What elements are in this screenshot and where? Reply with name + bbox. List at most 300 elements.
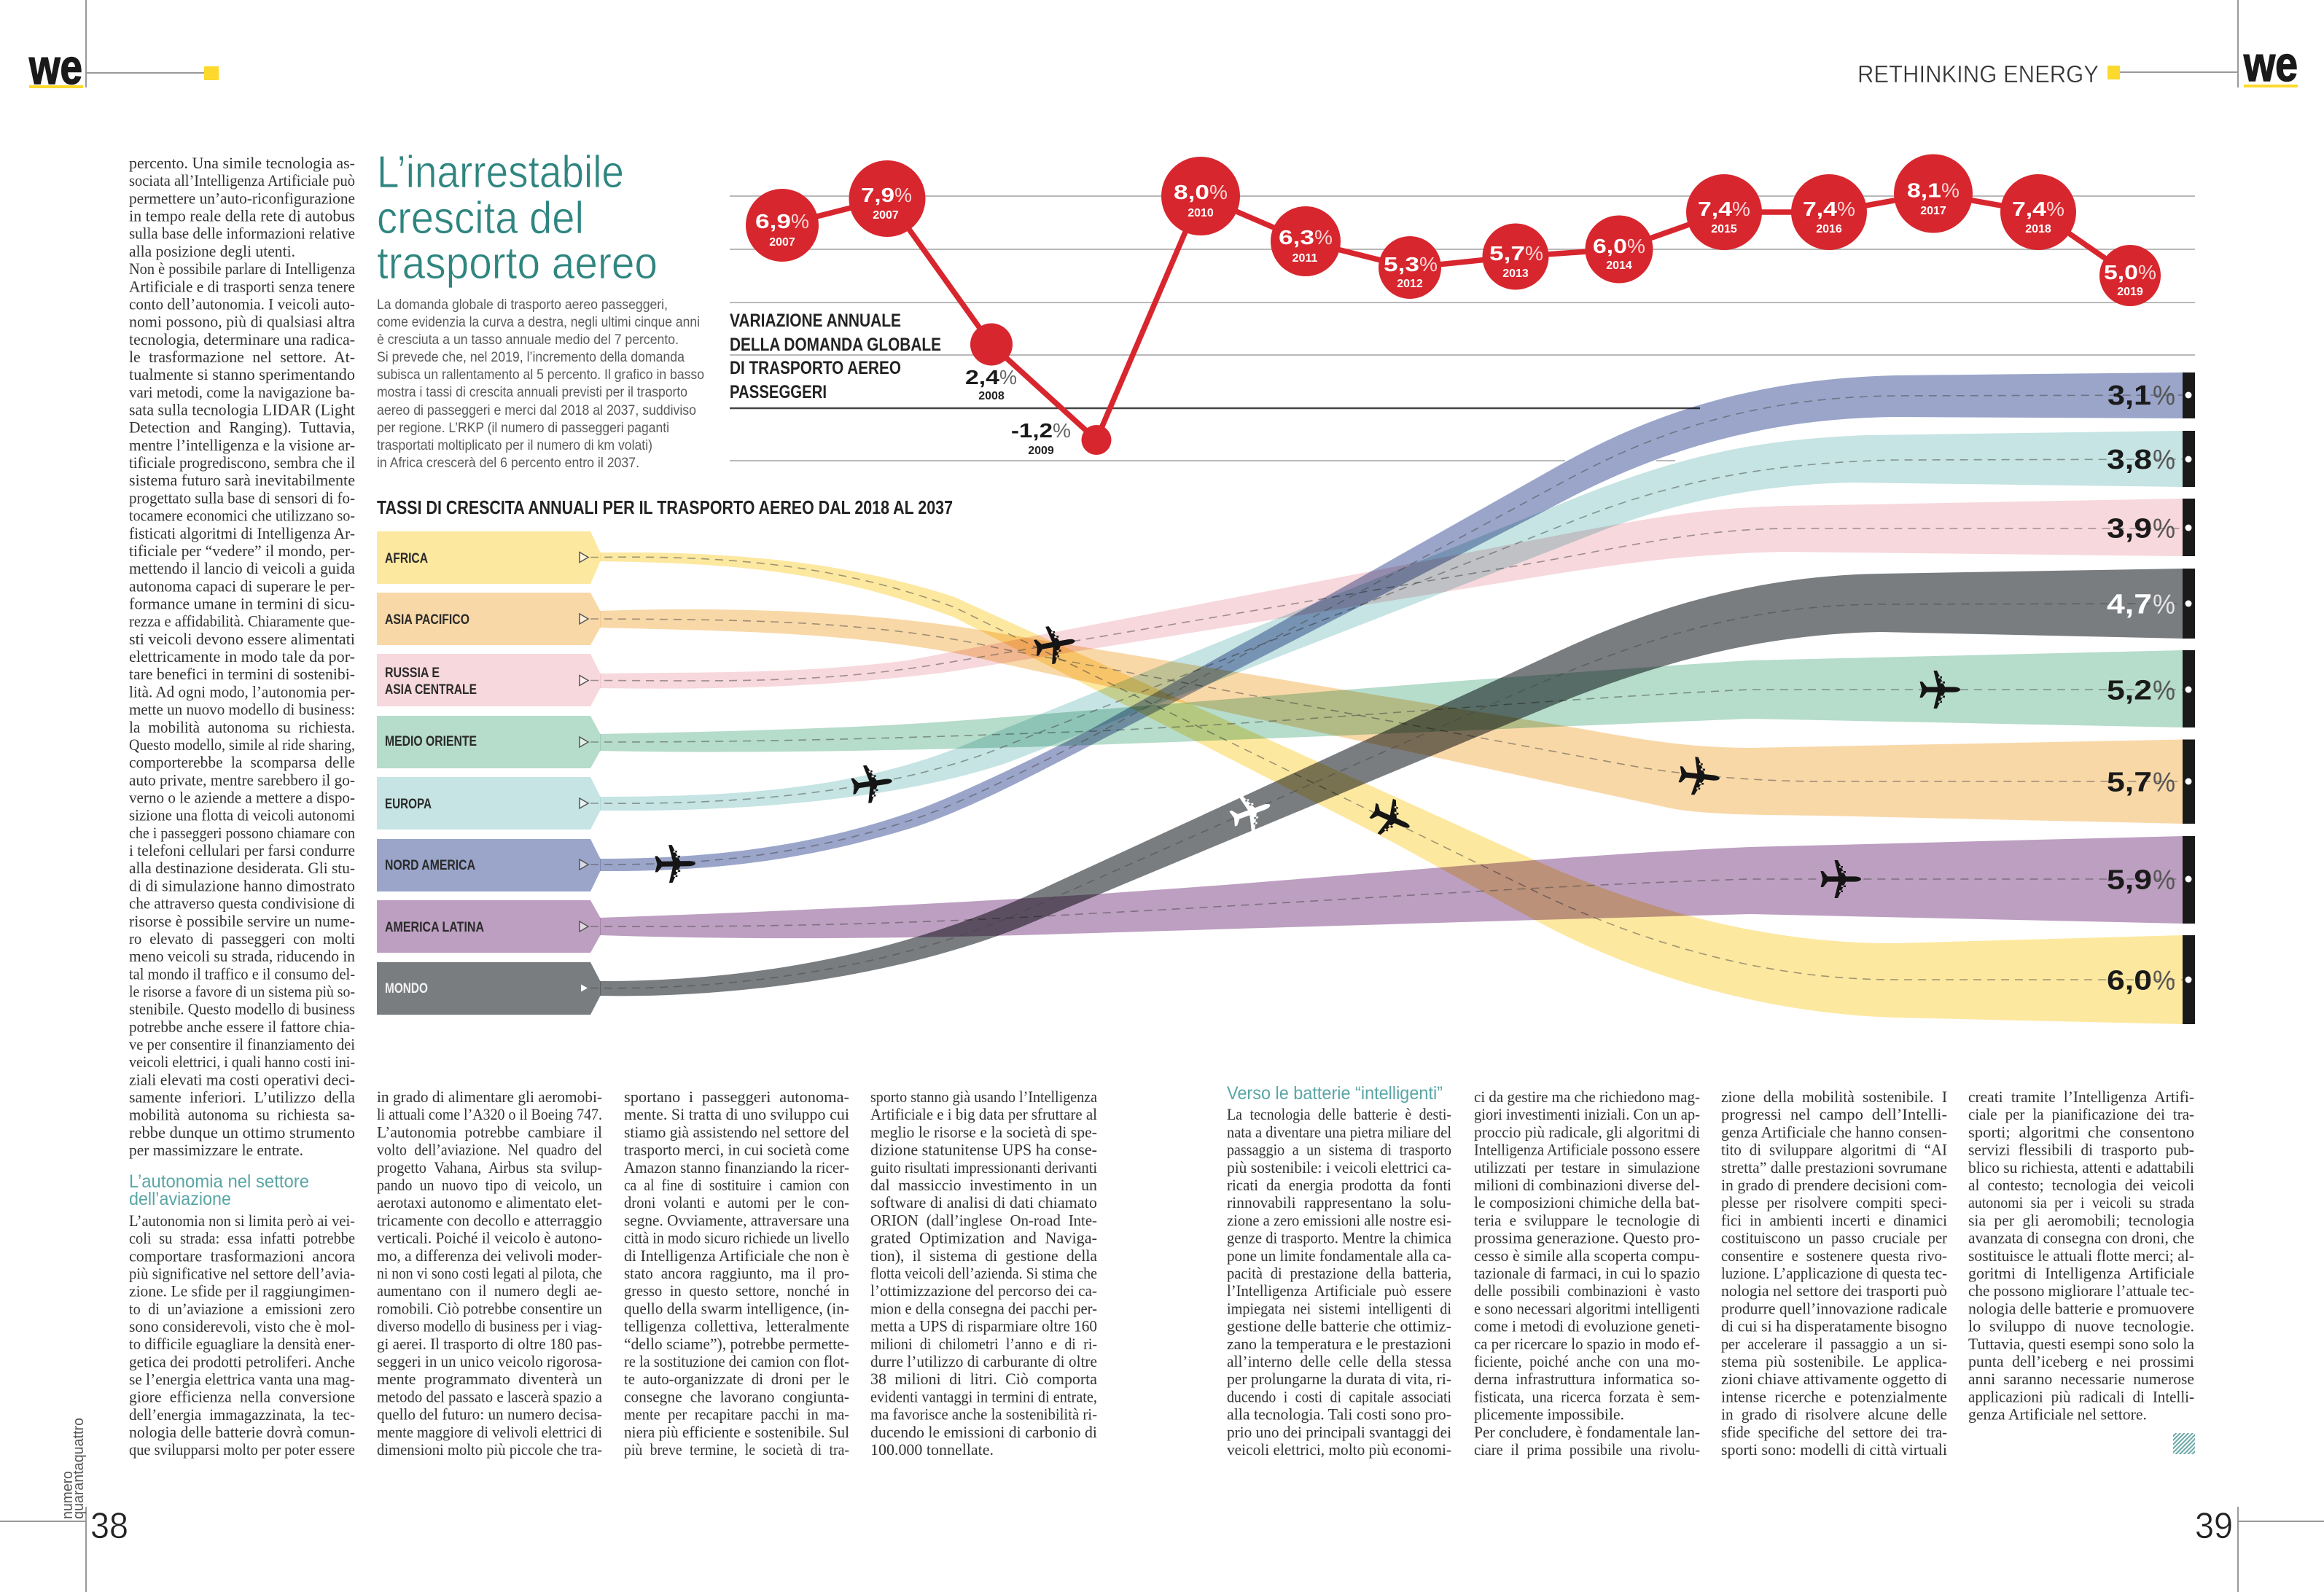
article text column 6: tazionale di farmaci, in cui lo spazio (1474, 1264, 1700, 1282)
article text column 5: l’Intelligenza Artificiale può essere (1227, 1281, 1451, 1300)
chart heading: DI TRASPORTO AEREO (730, 358, 901, 378)
article text column 6: cesso è simile alla scoperta compu- (1474, 1246, 1700, 1265)
region label: Africa (377, 531, 601, 584)
article text column 4: l’ottimizzazione del percorso dei ca- (870, 1281, 1097, 1300)
article text column 5: rinnovabili rappresentano la solu- (1227, 1193, 1451, 1211)
article text column 1: stenibile. Questo modello di business (129, 1000, 355, 1018)
data point 2010: 8,0%: 2010 (1188, 207, 1214, 219)
data point 2007: 7,9% (849, 160, 926, 237)
data point 2012: 5,3%: 2012 (1397, 278, 1423, 290)
article text column 3: gresso in questo settore, nonché in (624, 1281, 849, 1300)
flow band: Nord America (590, 372, 2183, 871)
article text column 7: consentire e sostenere questa rivo- (1721, 1246, 1947, 1265)
end bar and value: Europa 3,8%: % (2153, 445, 2175, 475)
article text column 7: sfide specifiche del settore dei tra- (1721, 1423, 1947, 1441)
article text column 4: flotta veicoli dell’azienda. Si stima che (870, 1264, 1097, 1282)
article text column 4: mion e della consegna dei pacchi per- (870, 1299, 1097, 1317)
title: trasporto aereo (377, 238, 658, 289)
end bar and value: Nord America 3,1%: 3,1 (2107, 381, 2151, 411)
region label: Mondo (377, 962, 601, 1015)
article text column 2: ni non vi sono costi legati al pilota, che (377, 1264, 602, 1282)
data point 2010: 8,0% (1161, 157, 1240, 235)
article text column 1: percento. Una simile tecnologia as- (129, 154, 355, 172)
article text column 8 (1968, 1088, 2194, 1424)
article text column 2: mente programmato diventerà un (377, 1370, 602, 1388)
article text column 1, lower section: to di un’aviazione a emissioni zero (129, 1300, 355, 1318)
flow chart: growth rates by region (377, 372, 2195, 1024)
article text column 3: più breve termine, le società di tra- (624, 1440, 849, 1459)
article text column 1: la mobilità autonoma su richiesta. (129, 718, 355, 736)
article text column 1: comporterebbe la scomparsa delle (129, 753, 355, 771)
article text column 6 (1474, 1088, 1700, 1459)
icon: airplane on Medio Oriente route (1920, 671, 1960, 709)
article text column 7: plesse per risolvere compiti speci- (1721, 1193, 1947, 1211)
article text column 2: pando un nuovo tipo di veicolo, un (377, 1176, 602, 1194)
data point 2009: -1,2%: 2009 (1028, 445, 1054, 457)
article text column 1: sti veicoli devono essere alimentati (129, 630, 355, 648)
data point 2015: 7,4%: % (1732, 198, 1750, 220)
data point 2017: 8,1%: 2017 (1920, 205, 1946, 217)
article text column 7: tito di sviluppare algoritmi di “AI (1721, 1141, 1947, 1159)
article text column 5: genze di trasporto. Mentre la chimica (1227, 1229, 1451, 1247)
article text column 7: zione della mobilità sostenibile. I (1721, 1088, 1947, 1106)
article text column 1: tare benefici in termini di sostenibi- (129, 665, 355, 683)
subheading: smart batteries: Verso le batterie “intelligenti” (1227, 1083, 1443, 1104)
flow band: Mondo (590, 569, 2183, 996)
article text column 1: ziali elevati ma costi operativi deci- (129, 1070, 355, 1088)
article text column 2: dimensioni molto più piccole che tra- (377, 1440, 602, 1459)
article text column 8: punta dell’iceberg e nei prossimi (1968, 1352, 2194, 1370)
article text column 5: veicoli elettrici, molto più economi- (1227, 1440, 1451, 1459)
chart grid lines (730, 196, 2195, 461)
region label: Russia e Asia Centrale: ASIA CENTRALE (385, 682, 477, 698)
article text column 1: Artificiale e di trasporti senza tenere (129, 277, 355, 295)
article text column 2: tricamente con decollo e atterraggio (377, 1211, 602, 1229)
article text column 3: quello della swarm intelligence, (in- (624, 1299, 849, 1317)
right page footer: page number: 39 (2195, 1505, 2233, 1546)
article text column 3: stato ancora raggiunto, ma il pro- (624, 1264, 849, 1282)
article text column 1: risorse è possibile servire un nume- (129, 912, 355, 930)
end bar and value: Russia e Asia Centrale 3,9%: % (2153, 513, 2175, 544)
article text column 4: milioni di chilometri l’anno e di ri- (870, 1335, 1097, 1353)
article text column 8: genza Artificiale nel settore. (1968, 1405, 2147, 1424)
left page footer: issue label and page number: 38 (90, 1505, 128, 1546)
article text column 2 (377, 1088, 602, 1459)
data point 2009: -1,2%: -1,2 (1011, 419, 1053, 442)
intro text block: subisca un rallentamento al 5 percento. Il grafico in basso (377, 367, 704, 383)
article text column 6: Intelligenza Artificiale possono essere (1474, 1141, 1700, 1159)
article text column 7: in grado di risolvere alcune delle (1721, 1405, 1947, 1424)
data point 2007: 6,9%: % (791, 210, 809, 233)
left page footer: issue label and page number: numero (60, 1471, 76, 1519)
article text column 1: progettato sulla base di sensori di fo- (129, 488, 355, 507)
article text column 6: ciare il prima possibile una rivolu- (1474, 1440, 1700, 1459)
chart heading: PASSEGGERI (730, 382, 827, 402)
left page header: We logo and marker (28, 0, 219, 95)
article text column 6: fisticata, una ricerca forzata è sem- (1474, 1387, 1700, 1405)
article text column 3: mente. Si tratta di uno sviluppo cui (624, 1105, 849, 1123)
article text column 8: al contesto; tecnologia dei veicoli (1968, 1176, 2194, 1194)
article text column 2: mo, a differenza dei velivoli moder- (377, 1246, 602, 1265)
article text column 1: rebbe dunque un ottimo strumento (129, 1123, 355, 1142)
article text column 1: verno o le aziende a mettere a dispo- (129, 789, 355, 806)
data point 2018: 7,4%: 2018 (2025, 223, 2051, 235)
article text column 6: delle possibili combinazioni è vasto (1474, 1281, 1700, 1300)
article text column 1: per massimizzare le entrate. (129, 1141, 303, 1159)
data point 2017: 8,1% (1894, 155, 1973, 233)
data point 2010: 8,0%: % (1209, 181, 1228, 203)
article text column 3: di Intelligenza Artificiale che non è (624, 1246, 849, 1265)
data point 2019: 5,0%: 5,0 (2104, 261, 2138, 284)
article text column 1: lità. Ad ogni modo, l’autonomia per- (129, 682, 355, 701)
flow band: Europa (590, 431, 2183, 811)
article text column 3: re la sostituzione dei camion con flot- (624, 1352, 849, 1370)
article text column 6: plicemente impossibile. (1474, 1405, 1624, 1424)
article text column 5: pacità di prestazione della batteria, (1227, 1264, 1451, 1282)
end bar and value: Africa 6,0% (2107, 935, 2195, 1024)
icon: airplane on Asia Pacifico route (1677, 755, 1722, 797)
article text column 6: ca per ricercare lo spazio in modo ef- (1474, 1335, 1700, 1353)
article text column 2: aumentano con il numero degli ae- (377, 1281, 602, 1300)
article text column 1: tificiale progrediscono, sembra che il (129, 453, 355, 472)
article text column 1: le trasformazione nel settore. At- (129, 348, 355, 366)
article text column 1: i telefoni cellulari per farsi condurre (129, 841, 355, 859)
article text column 1: tualmente si stanno sperimentando (129, 365, 355, 383)
article text column 3: consegne che lavorano congiunta- (624, 1387, 849, 1405)
article text column 1: sata sulla tecnologia LIDAR (Light (129, 401, 355, 418)
article text column 2: aerotaxi autonomo e alimentato elet- (377, 1193, 602, 1211)
article text column 3: segne. Ovviamente, attraversare una (624, 1211, 849, 1229)
article text column 5: impiegata nei sistemi intelligenti di (1227, 1299, 1451, 1317)
article text column 1: auto private, mentre sarebbero il go- (129, 770, 355, 789)
article text column 6: ci da gestire ma che richiedono mag- (1474, 1088, 1700, 1106)
article text column 2: verticali. Poiché il veicolo è autono- (377, 1229, 602, 1247)
article text column 1: sulla base delle informazioni relative (129, 225, 355, 243)
article text column 3: trasporto merci, in cui società come (624, 1141, 849, 1159)
article text column 4 (870, 1088, 1097, 1459)
article text column 5 (1227, 1105, 1451, 1459)
region label: Russia e Asia Centrale (377, 654, 601, 706)
article text column 8: goritmi di Intelligenza Artificiale (1968, 1264, 2194, 1282)
data point 2014: 6,0%: 6,0 (1593, 235, 1627, 257)
article text column 7: sporti sono: modelli di città virtuali (1721, 1440, 1947, 1459)
article text column 6: milioni di combinazioni diverse del- (1474, 1176, 1700, 1194)
article text column 7: produrre quell’innovazione radicale (1721, 1299, 1947, 1317)
data point 2013: 5,7%: % (1525, 242, 1543, 265)
article text column 1: di di simulazione hanno dimostrato (129, 876, 355, 894)
end bar and value: Nord America 3,1% (2107, 372, 2195, 418)
article text column 8: ciale per la pianificazione dei tra- (1968, 1105, 2194, 1123)
article text column 2: romobili. Ciò potrebbe consentire un (377, 1299, 602, 1317)
article text column 8: avanzata di consegna con droni, che (1968, 1229, 2194, 1247)
data point 2008: 2,4%: % (999, 366, 1017, 389)
right page footer: page number (2195, 1505, 2324, 1592)
article text column 5: passaggio a un sistema di trasporto (1227, 1141, 1451, 1159)
article text column 2: metodo del passato e lascerà spazio a (377, 1387, 602, 1405)
article text column 1, lower section: se l’energia elettrica vanta una mag- (129, 1370, 355, 1388)
end bar and value: Russia e Asia Centrale 3,9% (2107, 499, 2195, 556)
article text column 7: stretta” dalle prestazioni sovrumane (1721, 1158, 1947, 1177)
article text column 1: Detection and Ranging). Tuttavia, (129, 418, 355, 437)
data point 2014: 6,0% (1585, 216, 1653, 283)
article text column 8: nologia delle batterie e promuovere (1968, 1299, 2194, 1317)
article text column 1, lower section: comportare trasformazioni ancora (129, 1246, 355, 1265)
data point 2013: 5,7% (1483, 223, 1548, 290)
data point 2018: 7,4% (2000, 174, 2076, 250)
end bar and value: Mondo 4,7% (2107, 569, 2195, 639)
data point 2019: 5,0%: 2019 (2117, 286, 2143, 298)
data point 2011: 6,3%: 6,3 (1279, 226, 1314, 249)
line chart: annual change in global demand (730, 155, 2195, 461)
article text column 1, lower section: più significative nel settore dell’avia- (129, 1264, 355, 1283)
article text column 3: “dello sciame”), potrebbe permette- (624, 1335, 849, 1353)
article text column 2: gi aerei. Il trasporto di oltre 180 pas- (377, 1335, 602, 1353)
data point 2011: 6,3%: % (1314, 226, 1333, 249)
region label: Nord America (377, 839, 601, 891)
article text column 1: elettricamente in modo tale da por- (129, 647, 355, 666)
end bar and value: Africa 6,0%: % (2153, 965, 2175, 996)
chart heading: VARIAZIONE ANNUALE (730, 311, 901, 331)
article text column 6: derna infrastruttura informatica so- (1474, 1370, 1700, 1388)
article text column 2: seggeri in un unico veicolo rigorosa- (377, 1352, 602, 1370)
flow band: America Latina (590, 836, 2183, 938)
article text column 1, lower section: que svilupparsi molto per poter essere (129, 1440, 355, 1459)
article text column 5: all’interno delle celle della stessa (1227, 1352, 1451, 1370)
data point 2016: 7,4%: 2016 (1816, 223, 1842, 235)
article text column 1: sociata all’Intelligenza Artificiale può (129, 171, 355, 190)
article text column 7: di cui si ha disperatamente bisogno (1721, 1317, 1947, 1335)
article text column 8: sia per gli aeromobili; tecnologia (1968, 1211, 2194, 1229)
end bar and value: Africa 6,0%: 6,0 (2107, 965, 2152, 996)
article text column 1: permettere un’auto-riconfigurazione (129, 189, 355, 207)
article text column 1: ve per consentire il finanziamento dei (129, 1035, 355, 1053)
intro text block: La domanda globale di trasporto aereo passeggeri, (377, 297, 668, 313)
flow chart heading: TASSI DI CRESCITA ANNUALI PER IL TRASPORTO AEREO DAL 2018 AL 2037 (377, 496, 953, 518)
data point 2009: -1,2%: % (1053, 419, 1071, 442)
intro text block: mostra i tassi di crescita annuali previsti per il trasporto (377, 384, 687, 400)
region label: Asia Pacifico (377, 593, 601, 645)
article text column 1: tecnologia, determinare una radica- (129, 330, 355, 348)
article text column 1: alla destinazione desiderata. Gli stu- (129, 859, 355, 877)
red trend line (782, 194, 2130, 440)
article text column 7: nologia nel settore dei trasporti può (1721, 1281, 1947, 1300)
intro text block: come evidenzia la curva a destra, negli ultimi cinque anni (377, 314, 700, 330)
article text column 1: samente inferiori. L’utilizzo della (129, 1088, 355, 1107)
article text column 4: 100.000 tonnellate. (870, 1440, 994, 1459)
data point 2007: 7,9%: 7,9 (861, 184, 894, 206)
data point 2008: 2,4% (965, 324, 1017, 402)
article text column 4: guito risultati impressionanti derivanti (870, 1158, 1097, 1177)
article text column 1: conto dell’autonomia. I veicoli auto- (129, 294, 355, 313)
article text column 7: zioni chiave attivamente oggetto di (1721, 1370, 1947, 1388)
region label: Europa: EUROPA (385, 797, 432, 812)
data point 2011: 6,3%: 2011 (1292, 252, 1317, 265)
intro text block (377, 297, 704, 471)
article text column 1, lower section: nologia delle batterie dovrà comun- (129, 1423, 355, 1441)
article text column 8: lo sviluppo di nuove tecnologie. (1968, 1317, 2194, 1335)
article text column 1: tocamere economici che utilizzano so- (129, 507, 355, 525)
intro text block: Si prevede che, nel 2019, l’incremento della domanda (377, 349, 685, 365)
icon: white airplane on Mondo route (1225, 787, 1276, 837)
article text column 1: che i passeggeri possono chiamare con (129, 824, 355, 842)
article text column 5: gestione delle batterie che ottimiz- (1227, 1317, 1451, 1335)
article text column 1, lower section: sono considerevoli, visto che è mol- (129, 1317, 355, 1335)
article text column 5: zione a zero emissioni alle nostre esi- (1227, 1211, 1451, 1229)
article text column 8: sporti; algoritmi che consentono (1968, 1123, 2194, 1141)
data point 2014: 6,0%: 2014 (1606, 260, 1632, 272)
article text column 3: niera più efficiente e sostenibile. Sul (624, 1423, 849, 1441)
article text column 8: anni saranno necessarie numerose (1968, 1370, 2194, 1388)
article text column 1: vari metodi, come la navigazione ba- (129, 383, 355, 401)
article text column 5: nata a diventare una pietra miliare del (1227, 1123, 1451, 1141)
article text column 3: sportano i passeggeri autonoma- (624, 1088, 849, 1106)
article text column 1 (129, 154, 355, 1159)
article text column 7 (1721, 1088, 1948, 1459)
end bar and value: Medio Oriente 5,2%: 5,2 (2107, 675, 2152, 706)
article text column 8: Tuttavia, questi esempi sono solo la (1968, 1335, 2194, 1353)
article text column 6: ficiente, poiché anche con una mo- (1474, 1352, 1700, 1370)
article text column 5: prio uno dei principali svantaggi dei (1227, 1423, 1451, 1441)
flow band: Medio Oriente (590, 650, 2183, 752)
data point 2015: 7,4%: 2015 (1711, 223, 1737, 235)
article text column 1: autonoma capaci di superare le per- (129, 577, 355, 595)
article text column 3: droni volanti e automi per le con- (624, 1193, 849, 1211)
data point 2017: 8,1%: 8,1 (1907, 179, 1941, 201)
article text column 3: ca al fine di sostituire i camion con (624, 1176, 849, 1194)
intro text block: è cresciuta a un tasso annuale medio del 7 percento. (377, 332, 679, 348)
article text column 6: prossima generazione. Questo pro- (1474, 1229, 1700, 1247)
end bar and value: Asia Pacifico 5,7% (2107, 739, 2195, 824)
article text column 4: ducendo le emissioni di carbonio di (870, 1423, 1097, 1441)
data point 2015: 7,4% (1686, 174, 1762, 250)
data point 2011: 6,3% (1271, 206, 1341, 276)
data point 2012: 5,3% (1379, 236, 1441, 299)
data point 2007: 6,9%: 6,9 (755, 210, 791, 233)
end bar and value: Medio Oriente 5,2% (2107, 650, 2195, 727)
article text column 4: dizione statunitense UPS ha conse- (870, 1141, 1097, 1159)
data point 2013: 5,7%: 5,7 (1489, 242, 1525, 265)
article text column 1: potrebbe anche essere il fattore chia- (129, 1018, 355, 1036)
region label: America Latina: AMERICA LATINA (385, 920, 484, 935)
article text column 4: durre l’utilizzo di carburante di oltre (870, 1352, 1097, 1370)
data point 2015: 7,4%: 7,4 (1698, 198, 1732, 220)
region label: Europa (377, 777, 601, 830)
article text column 8: applicazioni più radicali di Intelli- (1968, 1387, 2194, 1405)
article text column 1: fisticati algoritmi di Intelligenza Ar- (129, 524, 355, 542)
article text column 5: più sostenibile: i veicoli elettrici ca- (1227, 1158, 1451, 1177)
article text column 7: intense ricerche e potenzialmente (1721, 1387, 1947, 1405)
end bar and value: America Latina 5,9%: 5,9 (2107, 865, 2152, 895)
region label: Russia e Asia Centrale: RUSSIA E (385, 666, 440, 681)
data point 2018: 7,4%: 7,4 (2012, 198, 2046, 220)
article text column 1: mobilità autonoma su richiesta sa- (129, 1106, 355, 1124)
icon: airplane on Russia route (1032, 623, 1078, 666)
end bar and value: Nord America 3,1%: % (2153, 381, 2175, 411)
title: crescita del (377, 193, 584, 243)
article text column 4: ma favorisce anche la sostenibilità ri- (870, 1405, 1097, 1424)
article text column 8: sostituisce le attuali flotte merci; al- (1968, 1246, 2194, 1265)
article text column 1: che attraverso questa condivisione di (129, 894, 355, 913)
chart heading: DELLA DOMANDA GLOBALE (730, 335, 941, 355)
article text column 6: Per concludere, è fondamentale lan- (1474, 1423, 1700, 1441)
article text column 1: mettendo il lancio di veicoli a guida (129, 559, 355, 577)
article text column 2: li attuali come l’A320 o il Boeing 747. (377, 1105, 602, 1123)
end bar and value: America Latina 5,9%: % (2153, 865, 2175, 895)
article text column 3: stiamo già assistendo nel settore del (624, 1123, 849, 1141)
article text column 8: creati tramite l’Intelligenza Artifi- (1968, 1088, 2194, 1106)
article text column 5: ducendo i costi di capitale associati (1227, 1387, 1451, 1405)
article text column 1, lower section: L’autonomia non si limita però ai vei- (129, 1211, 355, 1230)
article text column 1: tificiale per “vedere” il mondo, per- (129, 542, 355, 560)
article text column 3: città in modo sicuro richiede un livello (624, 1229, 849, 1247)
icon: airplane on Europa route (849, 762, 894, 805)
article text column 7: genza Artificiale che hanno consen- (1721, 1123, 1947, 1141)
data point 2019: 5,0%: % (2138, 261, 2156, 284)
intro text block: trasportati moltiplicato per il numero di km volati) (377, 437, 652, 453)
article text column 1, lower section: to difficile eguagliare la densità ener- (129, 1335, 355, 1353)
article text column 3: Amazon stanno finanziando la ricer- (624, 1158, 849, 1177)
data point 2012: 5,3%: 5,3 (1384, 253, 1419, 276)
article text column 2: quello del futuro: un numero decisa- (377, 1405, 602, 1424)
article text column 7: luzione. L’applicazione di questa tec- (1721, 1264, 1947, 1282)
region label: Asia Pacifico: ASIA PACIFICO (385, 612, 469, 628)
article text column 2: diverso modello di business per i viag- (377, 1317, 602, 1335)
article text column 4: ORION (dall’inglese On-road Inte- (870, 1211, 1097, 1229)
end mark: hatched square (2173, 1433, 2195, 1454)
article text column 1: sistema futuro sarà inevitabilmente (129, 471, 355, 489)
article text column 6: come i metodi di evoluzione geneti- (1474, 1317, 1700, 1335)
article text column 4: 38 milioni di litri. Ciò comporta (870, 1370, 1097, 1388)
article text column 4: dal massiccio investimento in un (870, 1176, 1097, 1194)
data point 2007: 7,9%: 2007 (873, 209, 899, 222)
article text column 1: nomi possono, più di qualsiasi altra (129, 313, 355, 331)
subheading: autonomy in aviation: L’autonomia nel settore (129, 1171, 309, 1192)
article text column 1: alla posizione degli utenti. (129, 242, 295, 260)
right page header: section name and We logo: we (2243, 36, 2298, 92)
article text column 7: costituiscono un passo cruciale per (1721, 1229, 1948, 1247)
data point 2007: 6,9%: 2007 (769, 236, 795, 249)
article text column 1: ro elevato di passeggeri con molti (129, 929, 355, 948)
article text column 1: veicoli elettrici, i quali hanno costi ini- (129, 1053, 355, 1071)
left page footer: issue label and page number (0, 1418, 128, 1592)
article text column 1: sizione una flotta di veicoli autonomi (129, 806, 355, 824)
article text column 4: sporto stanno già usando l’Intelligenza (870, 1088, 1097, 1106)
article text column 2: progetto Vahana, Airbus sta svilup- (377, 1158, 602, 1177)
data point 2016: 7,4% (1791, 174, 1867, 250)
icon: airplane on Nord America route (655, 845, 695, 883)
data point 2013: 5,7%: 2013 (1502, 268, 1529, 280)
region label: Africa: AFRICA (385, 551, 428, 566)
article text column 2: volto dell’aviazione. Nel quadro del (377, 1141, 602, 1159)
article text column 5: alla tecnologia. Tali costi sono pro- (1227, 1405, 1451, 1424)
region label: America Latina (377, 900, 601, 953)
article text column 4: tion), il sistema di gestione della (870, 1246, 1097, 1265)
data point 2010: 8,0%: 8,0 (1174, 181, 1209, 203)
article text column 1: rezza e affidabilità. Chiaramente que- (129, 612, 355, 631)
data point 2017: 8,1%: % (1941, 179, 1960, 201)
end bar and value: Europa 3,8%: 3,8 (2107, 445, 2152, 475)
intro text block: per regione. L’RKP (il numero di passeggeri paganti (377, 420, 669, 436)
right page header: section name and We logo (1857, 0, 2298, 92)
article text column 6: teria e sviluppare le tecnologie di (1474, 1211, 1700, 1229)
article text column 4: meglio le risorse e la società di spe- (870, 1123, 1097, 1141)
article text column 4: Artificiale e i big data per sfruttare al (870, 1105, 1097, 1123)
article text column 4: software di analisi di dati chiamato (870, 1193, 1097, 1211)
article text column 1: Non è possibile parlare di Intelligenza (129, 260, 355, 278)
data point 2007: 6,9% (746, 189, 819, 262)
intro text block: in Africa crescerà del 6 percento entro il 2037. (377, 455, 639, 471)
flow band: Africa (590, 553, 2183, 1024)
